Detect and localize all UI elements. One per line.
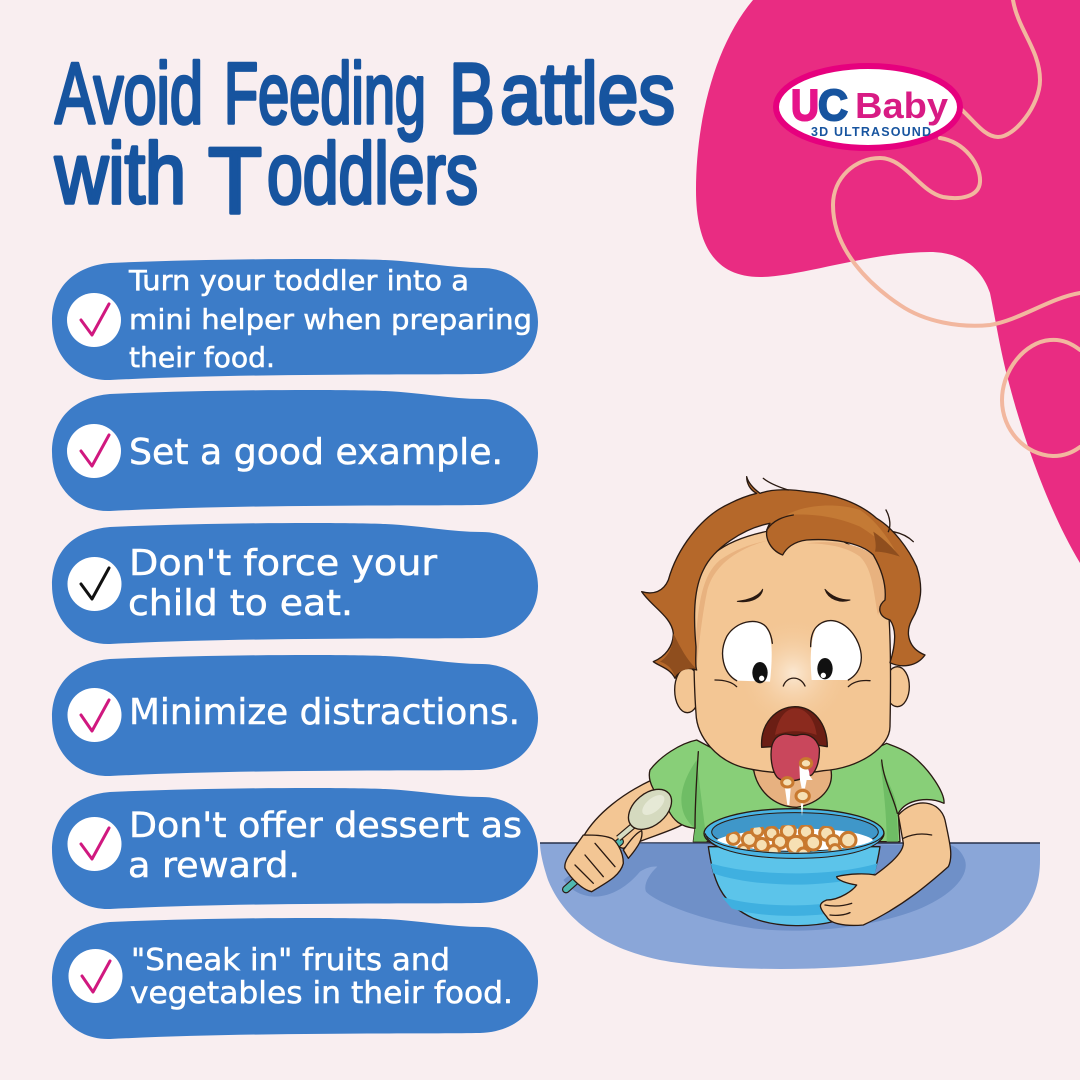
falling cereal and milk	[782, 759, 813, 816]
logo: UC Baby 3D Ultrasound: 3D ULTRASOUND	[811, 125, 931, 139]
tip 6	[52, 918, 538, 1039]
right arm and hand	[820, 803, 951, 925]
tip 6: vegetables in their food.	[130, 976, 513, 1011]
pink blob background	[696, 0, 1080, 563]
left hand	[565, 831, 642, 892]
title: with	[54, 126, 186, 222]
title: attles	[500, 46, 675, 142]
tip 3: Don't force your	[129, 543, 437, 584]
hair	[642, 477, 925, 678]
tip 4: Minimize distractions.	[129, 692, 520, 733]
logo: UC Baby 3D Ultrasound: C	[818, 81, 848, 130]
table	[540, 843, 1040, 969]
ears	[675, 667, 909, 713]
stray hairs	[763, 478, 913, 542]
spoon	[566, 781, 679, 889]
tip 2: Set a good example.	[129, 432, 503, 473]
tip 3	[52, 523, 538, 644]
tip 2	[52, 390, 538, 511]
bowl front rim	[705, 833, 884, 858]
tip 5: Don't offer dessert as	[129, 806, 522, 846]
tip 5	[52, 788, 538, 909]
decorative peach lines	[833, 0, 1080, 456]
tip 1: their food.	[129, 342, 275, 374]
shirt	[649, 740, 944, 842]
title: T	[208, 128, 262, 233]
mouth	[762, 707, 827, 781]
cereal rings	[726, 825, 858, 852]
bowl	[704, 809, 884, 926]
title: oddlers	[267, 126, 478, 222]
left forearm	[583, 780, 682, 848]
tip 5: a reward.	[128, 846, 300, 886]
illustration: toddler refusing cereal	[563, 477, 966, 931]
title: Feeding	[224, 46, 426, 142]
table shadow	[563, 843, 966, 931]
neck	[753, 768, 831, 807]
tip 6: "Sneak in" fruits and	[131, 943, 450, 978]
nose and cheek creases	[715, 678, 870, 687]
title: Avoid	[55, 46, 203, 142]
title	[54, 43, 675, 233]
logo: UC Baby 3D Ultrasound	[776, 66, 960, 148]
tip 3: child to eat.	[128, 583, 353, 624]
logo: UC Baby 3D Ultrasound: Baby	[855, 85, 948, 126]
tip 1	[52, 259, 538, 380]
title: B	[449, 43, 495, 155]
logo: UC Baby 3D Ultrasound: U	[791, 81, 819, 130]
tip 1: mini helper when preparing	[129, 304, 532, 336]
eyes	[723, 621, 861, 683]
eyebrows	[737, 589, 850, 602]
face	[694, 529, 891, 773]
tip 1: Turn your toddler into a	[128, 265, 469, 297]
tip 4	[52, 655, 538, 776]
